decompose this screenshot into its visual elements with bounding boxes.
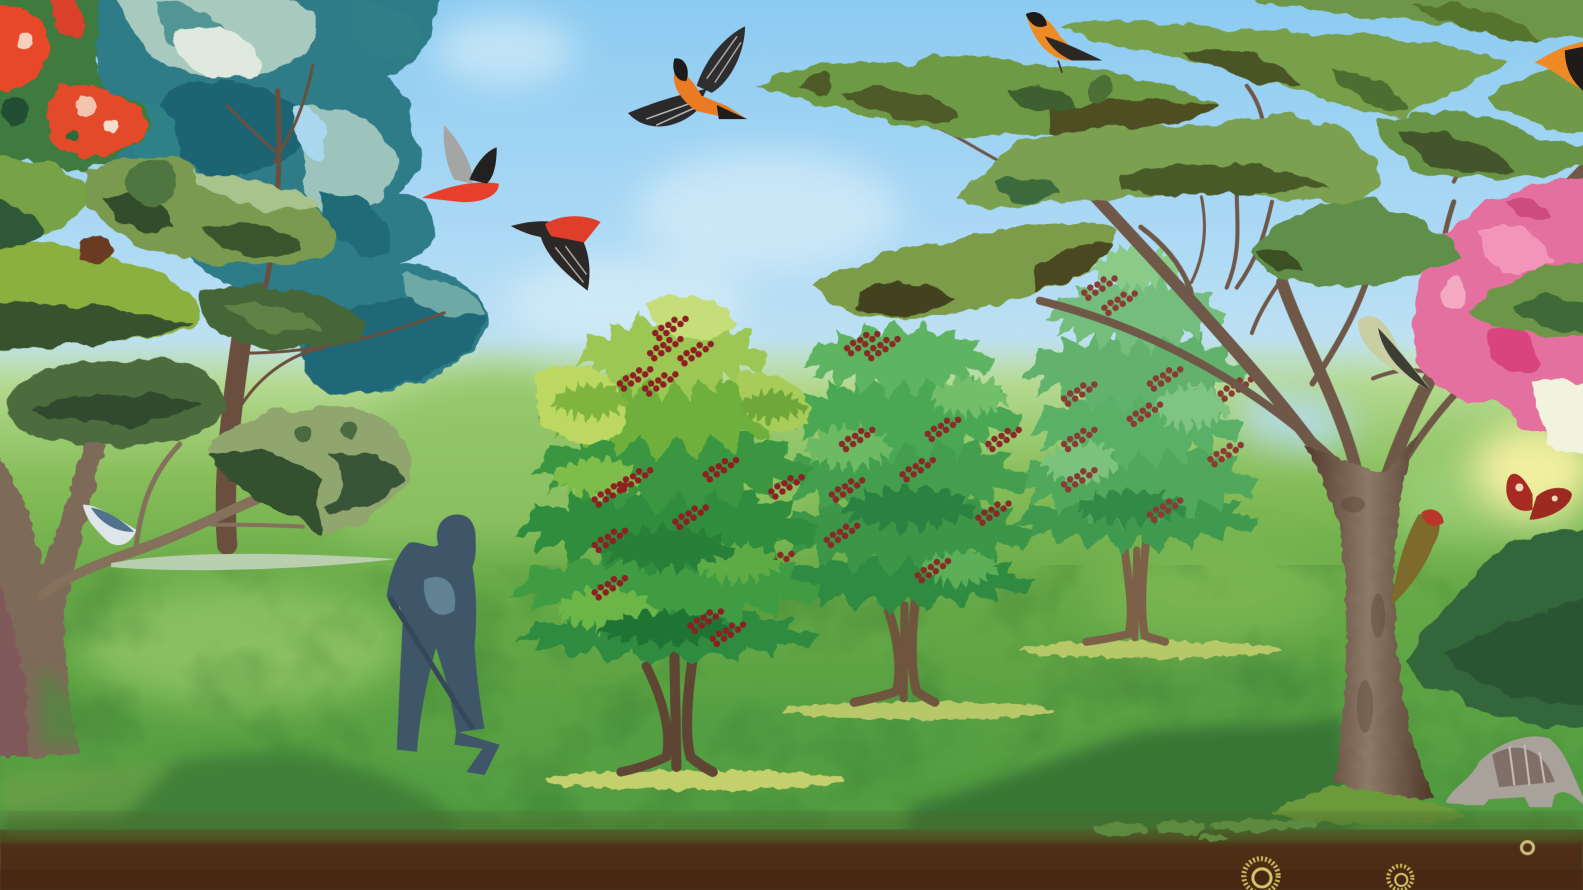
stream line in the distance <box>111 554 396 570</box>
trunk 3 <box>1086 535 1165 642</box>
red flowering tree <box>0 0 151 170</box>
soil band <box>0 813 1583 890</box>
ground patch 2 <box>782 701 1055 719</box>
berries 2 <box>758 331 1022 583</box>
foliage 3 <box>1011 242 1260 554</box>
ground patch 1 <box>545 770 844 790</box>
trunk 2 <box>854 590 935 702</box>
icon: red butterfly <box>1506 474 1572 520</box>
icon: woodpecker on trunk <box>1391 509 1444 605</box>
left shade tree: dark olive round canopy <box>7 357 225 447</box>
canopy: centre layer <box>954 115 1381 207</box>
icon: scarlet tanager perched in flight <box>422 125 499 202</box>
coffee plant 1 (front) <box>510 296 844 790</box>
canopy: upper right layer <box>1378 69 1583 178</box>
left shade tree: mottled grey-green canopy <box>207 406 413 533</box>
berries 1 <box>591 316 805 647</box>
lawn mottling wash <box>0 565 1583 827</box>
canopy: top centre layer <box>1060 22 1504 116</box>
foliage 1 <box>510 296 822 667</box>
icon: flying oriole <box>628 26 747 126</box>
icon: small flycatcher on branch <box>1358 316 1432 392</box>
grass at trunk base <box>1272 786 1464 824</box>
icon: millipede coil 3 <box>1521 842 1534 854</box>
background tree: teal foliage <box>61 0 488 396</box>
left shade tree: bright green canopy <box>0 235 200 351</box>
coffee plant 2 (middle) <box>758 320 1055 719</box>
ground patch 3 <box>1020 641 1282 659</box>
left shade tree: pale green upper canopy <box>0 155 339 265</box>
canopy: lower centre-right layer <box>1252 201 1459 286</box>
icon: scarlet tanager gliding <box>511 216 601 291</box>
icon: millipede coil 2 <box>1388 866 1412 890</box>
pink bougainvillea blossoms <box>1414 176 1583 454</box>
distant hedge wash <box>81 369 1583 762</box>
canopy: lower left layer <box>816 223 1121 319</box>
left shade tree: mid dark canopy <box>200 286 368 349</box>
green meadow <box>0 338 1583 848</box>
icon: blue-grey perched bird <box>83 505 136 545</box>
icon: millipede coil 1 <box>1244 859 1278 890</box>
canopy: top left layer <box>755 56 1217 134</box>
left shade tree: trunk <box>0 424 303 759</box>
coffee plant 3 (rear) <box>1011 242 1282 659</box>
dark green shrub <box>1406 529 1583 728</box>
foliage 2 <box>774 320 1034 615</box>
moss patches on soil <box>1094 818 1318 842</box>
background tree: trunk and branches <box>226 66 444 545</box>
right shade tree: branches <box>934 86 1583 505</box>
icon: farmer silhouette with hoe <box>387 514 500 775</box>
trunk 1 <box>621 646 713 772</box>
right shade tree: small lower-right canopy <box>1469 262 1583 336</box>
right shade tree: trunk <box>1302 434 1434 802</box>
lower grass mounds <box>0 666 1353 848</box>
sky cloud washes <box>434 16 1514 464</box>
icon: armadillo <box>1446 736 1583 807</box>
icon: orange oriole on upper branch <box>1026 12 1102 73</box>
canopy: top edge layer <box>1171 0 1583 40</box>
sky background <box>0 0 1583 454</box>
berries 3 <box>1061 275 1254 523</box>
icon: oriole at top right edge <box>1535 38 1583 106</box>
